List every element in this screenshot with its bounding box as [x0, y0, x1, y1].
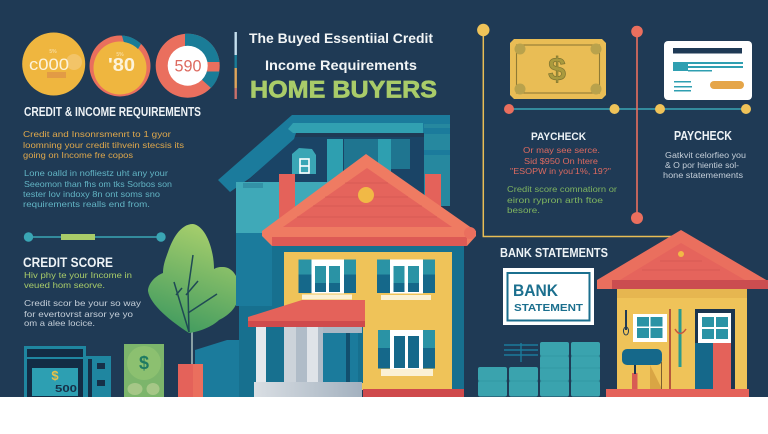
- text block: grey credit score: [24, 298, 142, 328]
- text block: teal detail: [23, 168, 172, 209]
- small house door: [695, 309, 735, 389]
- connector: credit score divider: [24, 232, 166, 242]
- text block: coral paycheck: Or may see serce.: [523, 146, 600, 155]
- front wall: [284, 252, 452, 390]
- bush behind tree: [195, 340, 239, 397]
- gauge: 590 score: 590: [174, 58, 202, 76]
- text block: teal detail: tester lov indoxy 8n ont soms sno: [23, 189, 160, 199]
- text block: green credit score: Hiv phy te your Income in: [24, 270, 132, 280]
- text block: grey paycheck: hone statemements: [663, 171, 743, 180]
- sign: bank statement: STATEMENT: [514, 302, 584, 314]
- gauge: 600 score: 5%: [49, 49, 57, 55]
- heading: paycheck right: PAYCHECK: [674, 129, 732, 143]
- text block: orange intro: loomning your credit tihvein stecsis its: [23, 140, 184, 150]
- small house roof: [597, 230, 768, 289]
- text block: green paycheck: besore.: [507, 206, 540, 215]
- gauge: 80 score: [90, 36, 150, 96]
- window: upper left: [298, 260, 356, 300]
- text block: green credit score: [24, 270, 132, 290]
- text block: green paycheck: Credit score comnatiorn or: [507, 185, 617, 194]
- text block: orange intro: going on Income fre copos: [23, 150, 133, 160]
- gauge: 600 score: c000: [29, 55, 69, 74]
- text block: grey credit score: om a alee locice.: [24, 318, 95, 328]
- side wall: [272, 244, 464, 390]
- connector: coral vertical: [631, 26, 643, 224]
- text block: orange intro: Credit and Insonrsmenrt to 1 gyor: [23, 129, 171, 139]
- icon: stacks of documents: [478, 342, 600, 396]
- icon: gold banknote: [510, 39, 606, 99]
- gauge: 80 score: '80: [108, 55, 135, 75]
- text block: grey paycheck: & O por hientie sol-: [665, 161, 739, 170]
- title block: [234, 30, 437, 104]
- text block: coral paycheck: Sid $950 On htere: [524, 157, 599, 166]
- small house window: [633, 314, 667, 342]
- text block: grey paycheck: Gatkvit celorfieo you: [665, 151, 746, 160]
- small house wall: [617, 289, 747, 389]
- back house: [218, 115, 450, 397]
- text block: coral paycheck: [510, 146, 611, 176]
- icon: wallet with 500: [24, 346, 111, 397]
- text block: green paycheck: [507, 185, 617, 215]
- text block: green credit score: veued hom seorve.: [24, 280, 105, 290]
- dot: coral marker: [464, 227, 476, 239]
- icon: wallet with 500: $: [51, 368, 59, 383]
- illustration: small house: [597, 230, 768, 397]
- heading: paycheck left: PAYCHECK: [531, 131, 586, 143]
- text block: teal detail: Lone oalld in nofliestz uht any your: [24, 168, 168, 178]
- sign: bank statement: [503, 268, 594, 325]
- front roof: [262, 154, 476, 246]
- icon: tree: [148, 224, 239, 397]
- garden tools: [624, 309, 686, 389]
- gauge: 590 score: [156, 34, 220, 98]
- text block: green paycheck: eiron rypron arth ftoe: [507, 196, 604, 205]
- text block: grey credit score: Credit scor be your so way: [24, 298, 142, 308]
- icon: paycheck card: [664, 41, 752, 100]
- title accent bar: [234, 32, 237, 99]
- small house porch base: [606, 389, 749, 397]
- text block: grey paycheck: [663, 151, 746, 180]
- gauge: 80 score: 5%: [116, 52, 124, 58]
- text block: teal detail: Seeomon than fhs om tks Sorbos son: [24, 179, 172, 189]
- mailbox: [622, 349, 662, 389]
- frame line: yellow connector: [477, 24, 680, 236]
- gauge: 600 score: [22, 32, 85, 96]
- icon: green banknote: $: [139, 353, 149, 373]
- icon: green banknote: [124, 344, 164, 397]
- donut gauges row: [22, 32, 220, 98]
- title main: home buyers: HOME BUYERS: [250, 76, 437, 104]
- illustration: main house: [218, 115, 476, 397]
- base strip: [363, 389, 464, 397]
- icon: wallet with 500: 500: [55, 384, 78, 395]
- title line 1: The Buyed Essentiial Credit: [249, 30, 433, 46]
- text block: grey credit score: for evertovrst arsor ye yo: [24, 309, 133, 319]
- chimneys: [279, 174, 441, 218]
- porch: [248, 300, 365, 397]
- window: upper right: [377, 260, 435, 300]
- window: lower right: [378, 330, 435, 376]
- text block: coral paycheck: "ESOPW in you'1%, 19?": [510, 167, 611, 176]
- heading: bank statements: BANK STATEMENTS: [500, 246, 608, 260]
- title line 2: Income Requirements: [265, 57, 417, 73]
- text block: teal detail: requirements realls end from.: [23, 199, 150, 209]
- sign: bank statement: BANK: [513, 281, 559, 300]
- heading: credit score: CREDIT SCORE: [23, 255, 113, 270]
- connector: horizontal timeline: [504, 104, 751, 114]
- icon: gold banknote: $: [548, 51, 566, 87]
- text block: orange intro: [23, 129, 184, 160]
- heading: credit and income requirements: CREDIT & INCOME REQUIREMENTS: [24, 105, 201, 119]
